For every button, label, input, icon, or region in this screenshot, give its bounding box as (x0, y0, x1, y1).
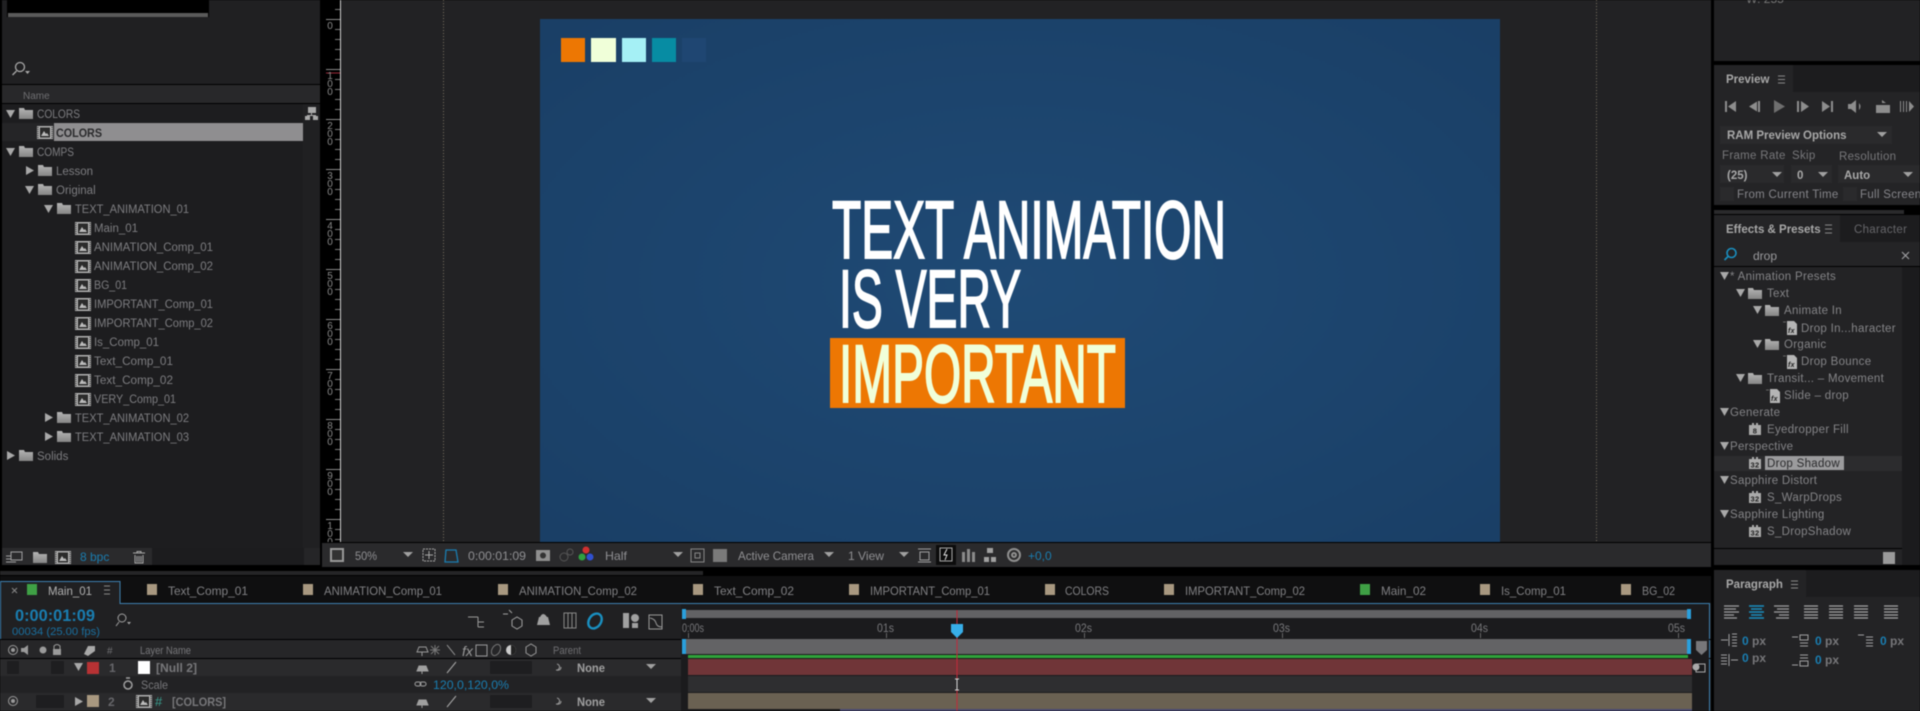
icon: timeline search (116, 614, 131, 626)
field: right indent (1721, 651, 1766, 666)
tabs (12, 584, 1675, 598)
tree item: TEXT_ANIMATION_03: TEXT_ANIMATION_03 (75, 432, 189, 444)
icon: justify last left (1804, 606, 1818, 618)
layer 1 row (0, 659, 682, 676)
icon: eye (8, 696, 18, 706)
icon: camera (536, 550, 550, 561)
ruler label 900 (327, 471, 333, 498)
playhead (951, 610, 963, 711)
ruler label 500: 5 (327, 271, 333, 282)
tree item: Lesson (26, 165, 93, 178)
skip dropdown (1791, 165, 1832, 183)
icon: justify last right (1854, 606, 1868, 618)
field: left indent: 0 px (1742, 634, 1766, 648)
skip dropdown: 0 (1797, 170, 1803, 182)
icon: exposure reset (1008, 549, 1020, 561)
panel: paragraph (1714, 570, 1920, 711)
icon: new folder (33, 552, 47, 563)
icon: justify all (1884, 606, 1898, 618)
tab: Main_02: Main_02 (1381, 584, 1426, 598)
icon: layer stack (1693, 664, 1705, 672)
ruler label 1000: 0 (327, 529, 333, 540)
icon: RAM preview (1900, 101, 1914, 112)
layer bar: COLORS (688, 693, 1692, 709)
icon: align right (1774, 606, 1789, 618)
timeline toolbar icons (468, 610, 662, 631)
ruler label 100: 0 (327, 79, 333, 90)
item: S_WarpDrops: S_WarpDrops (1767, 492, 1842, 504)
tab: BG_02: BG_02 (1642, 584, 1675, 598)
tab: ANIMATION_Comp_01: ANIMATION_Comp_01 (324, 584, 442, 598)
ruler label 900: 0 (327, 479, 333, 490)
effects footer (1714, 548, 1902, 565)
scale property row (0, 676, 682, 693)
ruler label 700: 0 (327, 379, 333, 390)
item: Animate In (1753, 305, 1842, 317)
headline line 1: TEXT ANIMATION (832, 185, 1226, 276)
ruler label 800: 8 (327, 421, 333, 432)
composition canvas (540, 19, 1500, 543)
layer 2 row: 2 (108, 695, 115, 709)
icon: frame blend (476, 645, 487, 656)
tree item: COLORS folder (6, 108, 80, 121)
item: Drop Bounce (1783, 355, 1871, 369)
project footer (2, 548, 320, 565)
item: Drop In Character: Drop In...haracter (1801, 323, 1896, 335)
ruler label 800 (327, 421, 333, 448)
item: Animate In: Animate In (1784, 305, 1842, 317)
thumbnail preview (7, 0, 209, 17)
icon: justify last center (1829, 606, 1843, 618)
ruler label 200: 2 (327, 121, 333, 132)
icon: motion blur (490, 643, 502, 657)
tree item: VERY_Comp_01: VERY_Comp_01 (94, 394, 176, 406)
ruler label 500 (327, 271, 333, 298)
icon: shy (417, 647, 428, 656)
icon: frame blending (564, 613, 576, 628)
alignment buttons (1724, 606, 1898, 618)
time ruler and layer bars (681, 604, 1709, 711)
field: first line indent: 0 px (1880, 634, 1904, 648)
resolution dropdown (1838, 165, 1920, 183)
icon: channels (560, 549, 573, 561)
ruler label 200 (327, 121, 333, 148)
field: space before (1792, 634, 1839, 648)
work area bar (682, 639, 1691, 654)
item: Drop Bounce: Drop Bounce (1801, 356, 1871, 368)
preview tab: Preview (1726, 74, 1770, 86)
icon: timeline (962, 549, 975, 562)
layer name heading: Layer Name (140, 645, 191, 657)
field: first line indent (1858, 634, 1904, 648)
ruler label 1000: 0 (327, 537, 333, 548)
icon: label (84, 646, 95, 656)
ruler label 400: 4 (327, 221, 333, 232)
item: Organic: Organic (1784, 339, 1826, 351)
time labels: 01s (877, 621, 894, 635)
icon: timeline end marker (1696, 641, 1707, 655)
tree item: IMPORTANT_Comp_01: IMPORTANT_Comp_01 (94, 299, 213, 311)
frame rate dropdown (1720, 165, 1784, 183)
field: left indent (1721, 634, 1766, 648)
layer name: [Null 2] (156, 661, 197, 675)
effects tree (1714, 271, 1902, 538)
icon: previous frame (1749, 101, 1760, 112)
icon: link (415, 682, 426, 686)
icon: audio (1848, 100, 1860, 113)
ruler label 0: 0 (327, 21, 333, 32)
tree item: COLORS comp: COLORS (56, 126, 102, 140)
paragraph tab: Paragraph (1726, 579, 1783, 591)
field: space after (1792, 653, 1839, 667)
item: Transit Movement: Transit... – Movement (1767, 373, 1885, 385)
active tab: Main_01: Main_01 (48, 584, 92, 598)
icon: eye (8, 646, 18, 654)
tree item: TEXT_ANIMATION_01: TEXT_ANIMATION_01 (75, 204, 189, 216)
ruler label 400: 0 (327, 229, 333, 240)
icon: audio (21, 645, 28, 655)
ruler label 400 (327, 221, 333, 248)
item: Drop Shadow: Drop Shadow (1767, 458, 1840, 470)
item: Text (1736, 288, 1790, 300)
tree item: Is_Comp_01: Is_Comp_01 (94, 337, 159, 349)
parent heading: Parent (553, 645, 581, 657)
tab: ANIMATION_Comp_02: ANIMATION_Comp_02 (519, 584, 637, 598)
tree item: Lesson: Lesson (56, 166, 93, 178)
icon: region of interest (691, 549, 704, 562)
tree item: Original (25, 184, 96, 197)
item: S_DropShadow: S_DropShadow (1767, 526, 1852, 538)
icon: safe margins (423, 549, 435, 561)
project column header: Name (23, 91, 50, 102)
ruler label 300: 3 (327, 171, 333, 182)
headline (830, 185, 1226, 420)
effects tab: Effects & Presets (1726, 224, 1821, 236)
icon: first frame (1725, 101, 1736, 112)
tree item: Main_01 (75, 222, 138, 235)
tree item: IMPORTANT_Comp_02: IMPORTANT_Comp_02 (94, 318, 213, 330)
exposure value: +0,0 (1028, 549, 1052, 563)
icon: pixel aspect (918, 549, 931, 562)
panel: info top (1714, 0, 1920, 61)
ruler label 500: 0 (327, 279, 333, 290)
item: Eyedropper Fill: Eyedropper Fill (1767, 424, 1849, 436)
icon: new comp (55, 551, 71, 564)
icon: align left (1724, 606, 1739, 618)
item: Sapphire Lighting: Sapphire Lighting (1730, 509, 1825, 521)
ruler label 100 (327, 71, 333, 98)
scale property row: 120,0,120,0% (433, 678, 509, 692)
label: resolution: Resolution (1839, 151, 1896, 163)
item: Text: Text (1767, 288, 1790, 300)
tree item: Solids (7, 450, 69, 463)
tree item: Main_01: Main_01 (94, 223, 138, 235)
icon: play (1774, 100, 1785, 113)
layer number: 1 (109, 661, 116, 675)
icon: project search (12, 62, 30, 75)
ruler label 200: 0 (327, 137, 333, 148)
icon: 3D (526, 644, 536, 656)
icon: trash (133, 552, 145, 563)
time labels: 03s (1273, 621, 1290, 635)
ruler label 100: 1 (327, 71, 333, 82)
item: Slide drop: Slide – drop (1784, 390, 1849, 402)
RAM preview options dropdown: RAM Preview Options (1727, 130, 1846, 142)
tab: COLORS (1045, 584, 1109, 598)
scale property row: Scale (141, 678, 168, 692)
tab: IMPORTANT_Comp_01: IMPORTANT_Comp_01 (870, 584, 990, 598)
ruler label 300: 0 (327, 179, 333, 190)
parent selector (556, 661, 656, 675)
preview labels (1722, 150, 1896, 163)
preview transport controls (1725, 100, 1914, 113)
tree item: Solids: Solids (37, 451, 69, 463)
tab: Text_Comp_01: Text_Comp_01 (168, 584, 248, 598)
icon: next frame (1797, 101, 1809, 112)
tree item: ANIMATION_Comp_02: ANIMATION_Comp_02 (94, 261, 213, 273)
layer 2 row (0, 693, 682, 711)
tree item: ANIMATION_Comp_01: ANIMATION_Comp_01 (94, 242, 213, 254)
icon: draft 3D (503, 610, 522, 629)
ruler label 600: 0 (327, 329, 333, 340)
ruler label 600: 6 (327, 321, 333, 332)
field: space before: 0 px (1815, 634, 1839, 648)
ruler label 400: 0 (327, 237, 333, 248)
item: Animation Presets: * Animation Presets (1730, 271, 1836, 283)
icon: composition mini flowchart (468, 617, 484, 627)
vertical ruler (322, 0, 341, 548)
icon: clear (1902, 252, 1909, 259)
icon: quality (447, 645, 455, 655)
icon: fast previews (936, 545, 956, 565)
headline line 2: IS VERY (839, 254, 1021, 345)
active tab: Main_01 (12, 584, 110, 598)
layer 2 row: # (155, 694, 163, 709)
tab: Text_Comp_02: Text_Comp_02 (714, 584, 794, 598)
time labels: 0:00s (682, 621, 704, 635)
icon: solo (40, 646, 46, 654)
ruler label 300 (327, 171, 333, 198)
timecode: 0:00:01:09 (15, 606, 95, 625)
item: Generate: Generate (1730, 407, 1780, 419)
option: from current time: From Current Time (1737, 189, 1839, 201)
parent selector: None (577, 661, 605, 675)
tab: Main_02 (1360, 584, 1426, 598)
icon: motion blur active (585, 611, 605, 631)
tab: IMPORTANT_Comp_02: IMPORTANT_Comp_02 (1185, 584, 1305, 598)
effects search field (1724, 248, 1909, 263)
panel: project (2, 0, 320, 565)
number heading: # (107, 646, 113, 657)
resolution: Half (605, 549, 628, 563)
icon: hide shy layers (537, 614, 550, 625)
icon: color channels (578, 546, 594, 560)
tree item: Original: Original (56, 185, 96, 197)
item: Perspective: Perspective (1730, 441, 1793, 453)
tree item: COLORS comp (37, 126, 102, 140)
tab: Is_Comp_01: Is_Comp_01 (1501, 584, 1566, 598)
panel: preview (1714, 65, 1920, 205)
tab: COLORS: COLORS (1065, 584, 1109, 598)
timecode: 00034 (25.00 fps) (12, 626, 100, 638)
layer bar: Null 2 (688, 659, 1692, 675)
item: Sapphire Distort: Sapphire Distort (1730, 475, 1818, 487)
zoom level: 50% (355, 549, 377, 563)
timecode (12, 606, 100, 638)
viewer scrollbar (0, 571, 703, 575)
colour swatches (561, 38, 706, 62)
ruler label 100: 0 (327, 87, 333, 98)
tree item: BG_01: BG_01 (94, 280, 127, 292)
ruler label 1000 (327, 521, 333, 548)
time labels (682, 621, 1685, 635)
icon: collapse (430, 645, 440, 655)
icon: loop (1876, 100, 1890, 113)
layer switches (417, 661, 532, 674)
time labels: 02s (1075, 621, 1092, 635)
icon: effect: fx (462, 643, 474, 659)
ruler label 700: 0 (327, 387, 333, 398)
label: skip: Skip (1792, 150, 1816, 162)
icon: last frame (1822, 101, 1833, 112)
icon: graph editor lamp (623, 613, 639, 628)
render bar (688, 655, 1688, 658)
ruler label 900: 0 (327, 487, 333, 498)
option: full screen (1843, 187, 1920, 201)
ruler label 900: 9 (327, 471, 333, 482)
indent and spacing fields (1721, 634, 1904, 667)
tree item: COLORS folder: COLORS (37, 109, 80, 121)
ruler label 1000: 1 (327, 521, 333, 532)
switch icons (417, 643, 536, 659)
label: frame rate: Frame Rate (1722, 150, 1786, 162)
tab: BG_02 (1621, 584, 1675, 598)
icon: transparency grid (713, 549, 727, 562)
ruler label 800: 0 (327, 429, 333, 440)
item: Organic (1753, 339, 1826, 351)
field: right indent: 0 px (1742, 651, 1766, 665)
effects search field: drop (1753, 249, 1777, 263)
view layout: 1 View (848, 549, 884, 563)
ruler label 200: 0 (327, 129, 333, 140)
project tree (2, 108, 303, 463)
icon: search (1724, 248, 1736, 260)
icon: adjustment (506, 645, 516, 655)
time labels: 04s (1471, 621, 1488, 635)
tree item: COMPS: COMPS (37, 147, 74, 159)
icon: stopwatch (124, 678, 132, 689)
icon: interpret footage (6, 552, 22, 562)
icon: flowchart view (984, 548, 996, 562)
camera view: Active Camera (738, 549, 814, 563)
time labels: 05s (1668, 621, 1685, 635)
frame rate dropdown: (25) (1727, 170, 1748, 182)
item: Slide drop (1766, 389, 1849, 403)
tree item: Text_Comp_02: Text_Comp_02 (94, 375, 173, 387)
ruler label 600 (327, 321, 333, 348)
timecode: 0:00:01:09 (468, 549, 526, 563)
layer 2 row: [COLORS] (172, 695, 226, 709)
layer column header (0, 640, 1711, 659)
ruler label 300: 0 (327, 187, 333, 198)
icon: align center active (1749, 606, 1764, 618)
tree item: COMPS (6, 146, 74, 159)
layer 2 row: None (577, 695, 605, 709)
ruler label 600: 0 (327, 337, 333, 348)
tree item: BG_01 (75, 279, 127, 292)
headline line 3 highlight: IMPORTANT (839, 329, 1116, 420)
option: full screen: Full Screen (1860, 189, 1920, 201)
panel: effects and presets (1714, 215, 1920, 565)
guides (444, 0, 1596, 543)
bit depth: 8 bpc (80, 550, 109, 564)
headline line 3 highlight (830, 329, 1125, 420)
tree item: Text_Comp_01: Text_Comp_01 (94, 356, 173, 368)
icon: graph editor (649, 615, 662, 629)
character tab: Character (1854, 224, 1907, 236)
icon: snapshot thumbnail (330, 548, 344, 562)
icon: mask toggle (445, 550, 458, 562)
ruler label 500: 0 (327, 287, 333, 298)
panel: composition viewer (322, 0, 1711, 567)
RAM preview options dropdown (1720, 126, 1892, 144)
panel: timeline (0, 576, 1711, 711)
text cursor (955, 679, 959, 690)
ruler label 700: 7 (327, 371, 333, 382)
field: space after: 0 px (1815, 653, 1839, 667)
resolution dropdown: Auto (1844, 170, 1870, 182)
ruler label 700 (327, 371, 333, 398)
icon: lock (53, 644, 61, 655)
ruler label 800: 0 (327, 437, 333, 448)
work area navigator (682, 609, 1691, 619)
tree item: TEXT_ANIMATION_02: TEXT_ANIMATION_02 (75, 413, 189, 425)
scale row track (688, 676, 1692, 692)
icon: flowchart (305, 107, 318, 120)
viewer toolbar (322, 542, 1711, 567)
project column header (2, 84, 320, 104)
